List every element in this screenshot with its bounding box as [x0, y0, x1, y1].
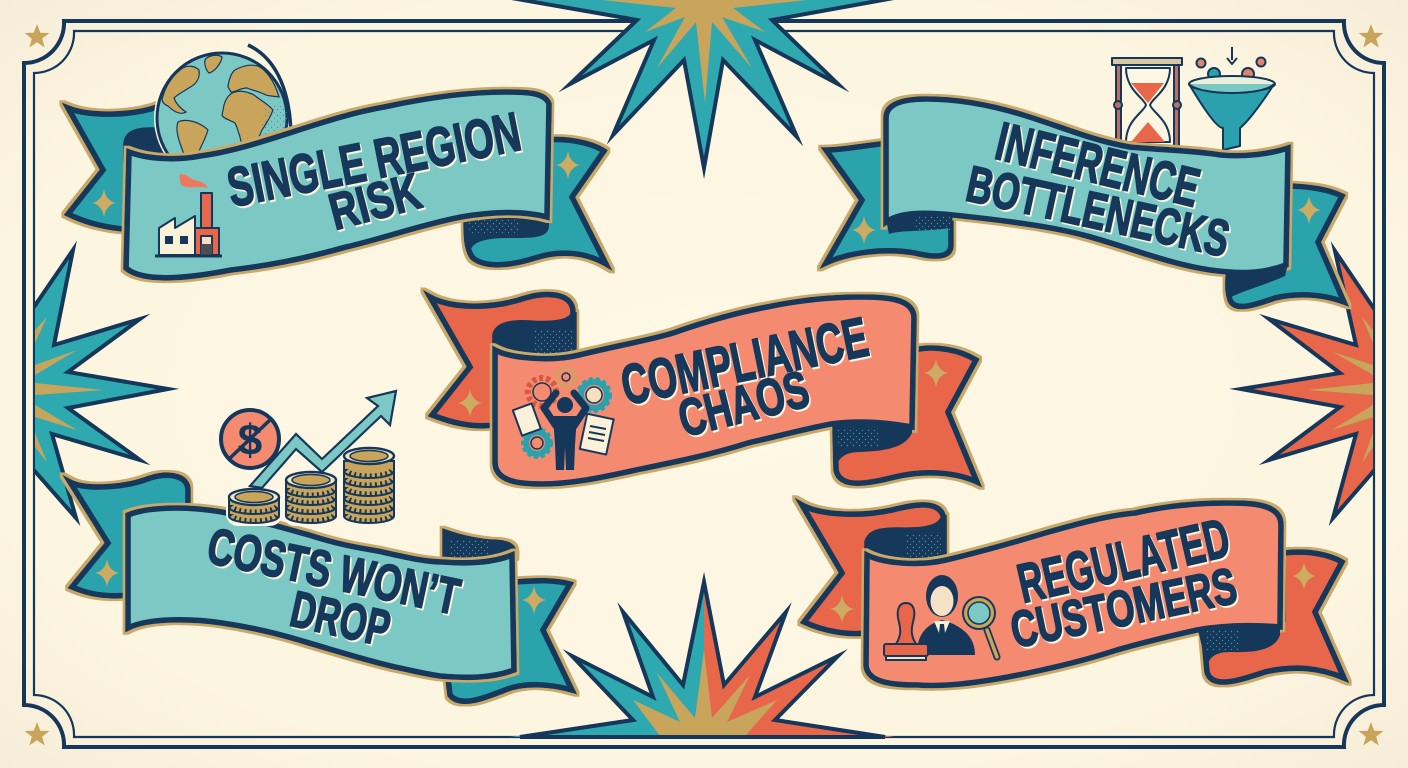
icon: crossed dollar: $: [238, 416, 262, 465]
icon: factory: [155, 174, 222, 256]
banner 5 text: CUSTOMERS: [1006, 557, 1242, 659]
sparkles: [95, 559, 546, 614]
icon: hourglass: [1112, 58, 1182, 150]
starburst: bottom: [510, 582, 895, 737]
banner 1 text: RISK: [323, 162, 427, 241]
icon: funnel: [1189, 47, 1275, 150]
starburst: right: [1241, 251, 1385, 518]
banner 4 face: [128, 508, 514, 677]
icon: rising arrow: [250, 391, 396, 488]
banner 3 face: [495, 297, 914, 484]
icon: compliance chaos person: [513, 368, 614, 470]
banner 1 text: [222, 100, 526, 241]
banner 2 tails and fold: [826, 143, 1344, 306]
banner 3 fold: [832, 422, 912, 468]
sparkles: [852, 196, 1321, 244]
banner 4 text: COSTS WON’T: [203, 517, 465, 626]
banner 4 tails and fold: [70, 475, 572, 701]
banner 2 text: INFERENCE: [990, 111, 1205, 219]
sparkles: [830, 562, 1316, 623]
banner 3 text: CHAOS: [673, 360, 815, 449]
banner 4 text: [203, 517, 465, 658]
banner 2 folds: [886, 213, 1288, 298]
starburst: top: [500, 0, 905, 168]
banner 5 tails and fold: [802, 505, 1344, 682]
banner 2 text: [962, 111, 1235, 268]
banner 3 text: COMPLIANCE: [616, 305, 873, 417]
banner: regulated customers: [802, 503, 1344, 686]
banner: compliance chaos: [430, 295, 977, 484]
banner 1 face: [126, 92, 549, 278]
banner 5 text: REGULATED: [1012, 506, 1235, 615]
sparkles: [458, 359, 948, 417]
banner: costs won't drop: [70, 391, 572, 701]
gears: [523, 368, 610, 457]
banner 1 tails and fold: [68, 106, 606, 265]
banner 3 tails and fold: [430, 295, 977, 483]
starburst: left: [25, 250, 168, 518]
banner 3 text: [616, 305, 873, 449]
banner 5 face: [866, 503, 1281, 686]
icon: globe: [154, 43, 292, 154]
banner: single region risk: [68, 45, 606, 278]
banner 1 text: SINGLE REGION: [222, 100, 526, 219]
banner: inference bottlenecks: [826, 47, 1344, 306]
banner 5 fold: [1198, 626, 1280, 668]
icon: coin stacks: [226, 448, 397, 526]
banner 2 text: BOTTLENECKS: [962, 155, 1235, 268]
icon: regulator with stamp and magnifier: [884, 575, 997, 660]
sparkles: [92, 151, 580, 217]
icon: crossed dollar: [221, 410, 279, 468]
banner 5 text: [1006, 506, 1242, 659]
banner 4 text: DROP: [286, 580, 396, 658]
banner 2 face: [886, 99, 1288, 273]
